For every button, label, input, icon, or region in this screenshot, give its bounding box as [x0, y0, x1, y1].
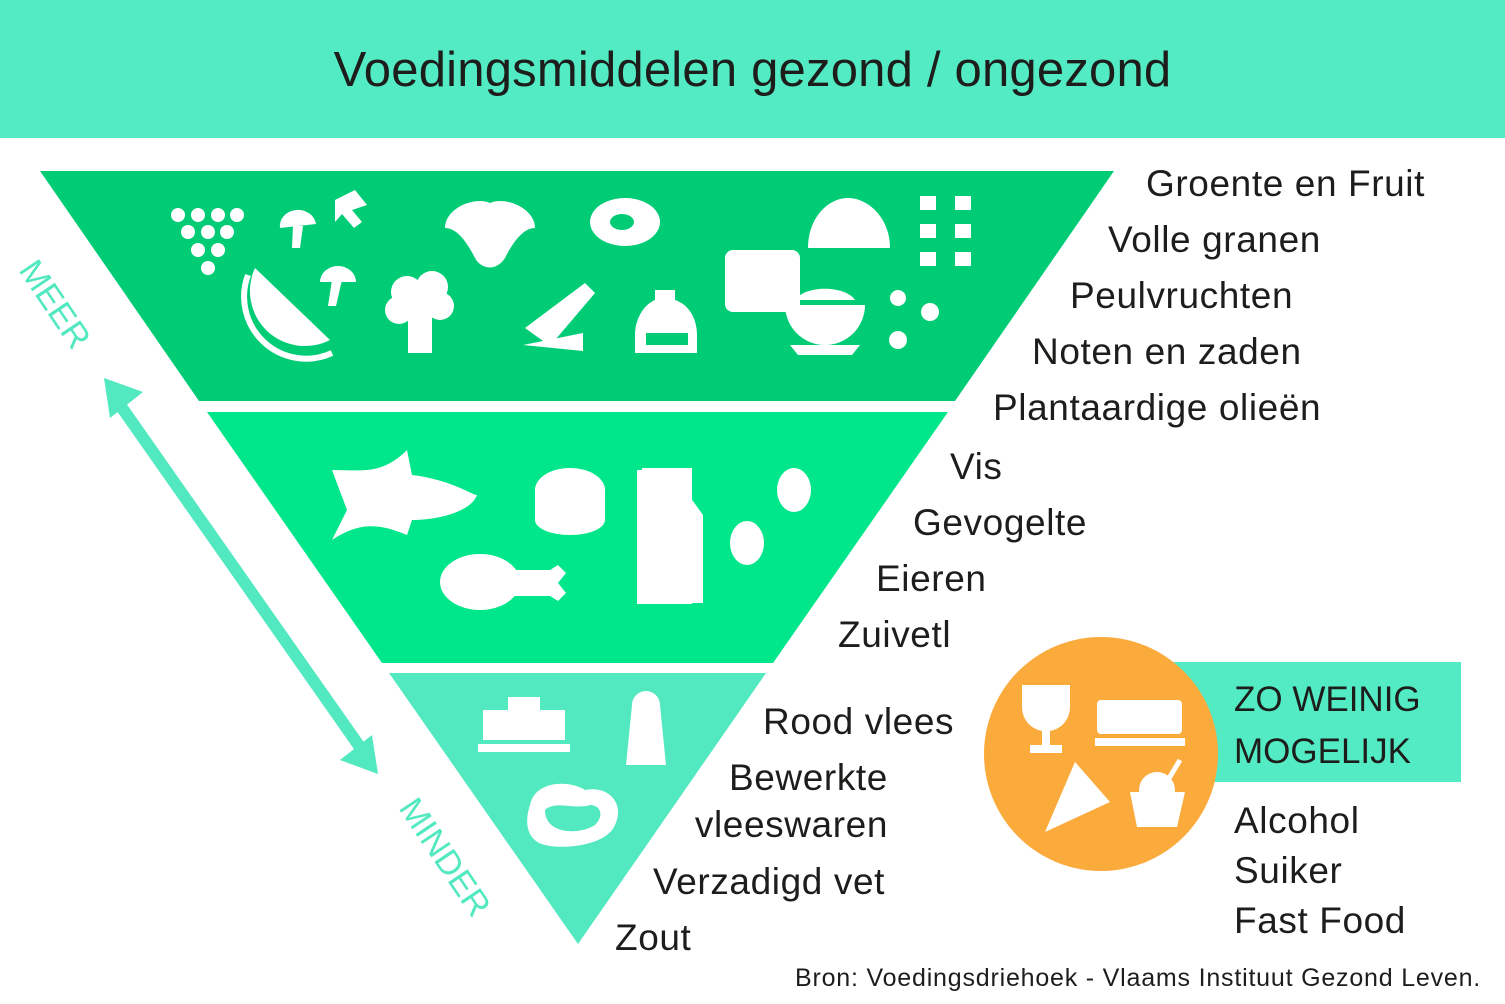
labels: Groente en Fruit: [1146, 163, 1425, 204]
text: Peulvruchten: [1070, 275, 1293, 316]
text: Vis: [950, 446, 1003, 487]
text: Suiker: [1234, 850, 1342, 891]
callout: zo weinig mogelijk: [984, 637, 1461, 871]
text: MINDER: MINDER: [391, 791, 498, 924]
text: Eieren: [876, 558, 987, 599]
text: Alcohol: [1234, 800, 1360, 841]
text: Volle granen: [1108, 219, 1321, 260]
text: Rood vlees: [763, 701, 954, 742]
text: Fast Food: [1234, 900, 1406, 941]
source: Bron: Voedingsdriehoek - Vlaams Instituut Gezond Leven.: [795, 964, 1481, 992]
text: Gevogelte: [913, 502, 1087, 543]
icons: bottom band: [478, 691, 666, 847]
text: ZO WEINIG: [1234, 680, 1421, 719]
text: Noten en zaden: [1032, 331, 1302, 372]
band: bottom: [389, 673, 766, 944]
text: Bewerkte vleeswaren: [695, 757, 888, 845]
text: Zuivetl: [838, 614, 951, 655]
icons: top band: [171, 190, 971, 359]
band: top: [40, 171, 1114, 401]
icons: middle band: [332, 450, 811, 610]
header: [0, 0, 1505, 138]
text: MEER: MEER: [11, 253, 98, 356]
text: Verzadigd vet: [653, 861, 885, 902]
text: MOGELIJK: [1234, 732, 1411, 771]
band: middle: [207, 412, 948, 663]
text: Plantaardige olieën: [993, 387, 1321, 428]
title: Voedingsmiddelen gezond / ongezond: [334, 43, 1171, 97]
icons: orange circle: [1022, 685, 1185, 832]
arrow: meer/minder: [104, 378, 378, 774]
text: Zout: [615, 917, 691, 958]
